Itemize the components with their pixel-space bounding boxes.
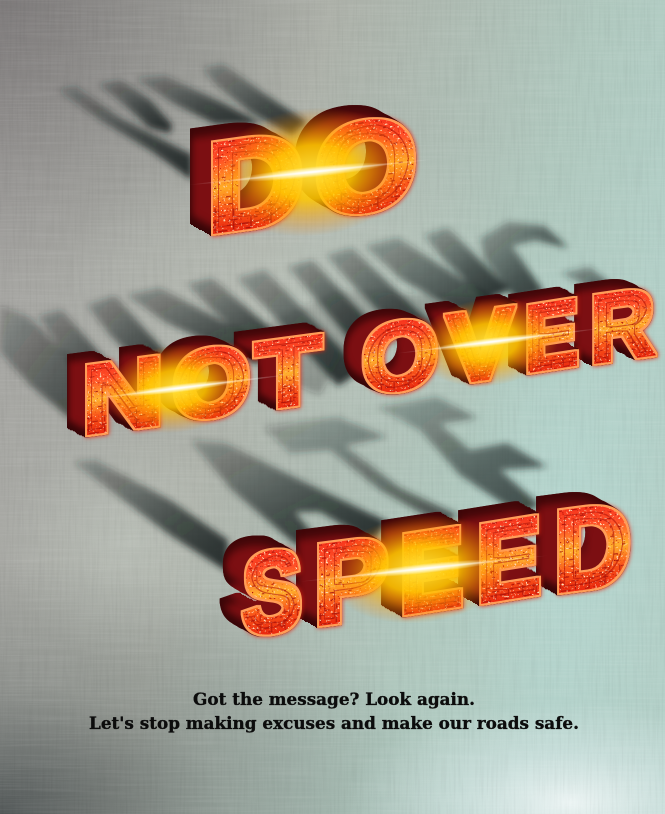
light flare on DO (181, 95, 443, 249)
word: DO (207, 91, 417, 259)
letter: E: E (400, 504, 463, 637)
letter: N: N (82, 337, 164, 454)
caption line 1: Got the message? Look again. (193, 690, 475, 709)
letter: O: O (173, 325, 250, 441)
caption (89, 690, 579, 733)
caption line 2: Let's stop making excuses and make our roads safe. (89, 714, 579, 733)
letter: V: V (447, 287, 513, 404)
cast shadows of hidden message (0, 64, 640, 572)
letter: E: E (477, 494, 541, 625)
word: NOT (82, 316, 321, 454)
letter: E: E (525, 279, 578, 392)
letter: O: O (362, 297, 438, 414)
letter: O: O (315, 91, 417, 244)
light flare on SPEED (294, 502, 554, 635)
letter: T: T (255, 316, 321, 429)
word: OVER (362, 269, 654, 414)
word: SPEED (242, 480, 631, 659)
light flare on OVER (390, 284, 610, 397)
letter: S: S (242, 526, 302, 659)
letter: D: D (554, 480, 631, 616)
letter: P: P (314, 513, 388, 648)
letter: D: D (207, 107, 303, 259)
light flare on NOT (80, 330, 300, 443)
letter: R: R (590, 269, 654, 383)
